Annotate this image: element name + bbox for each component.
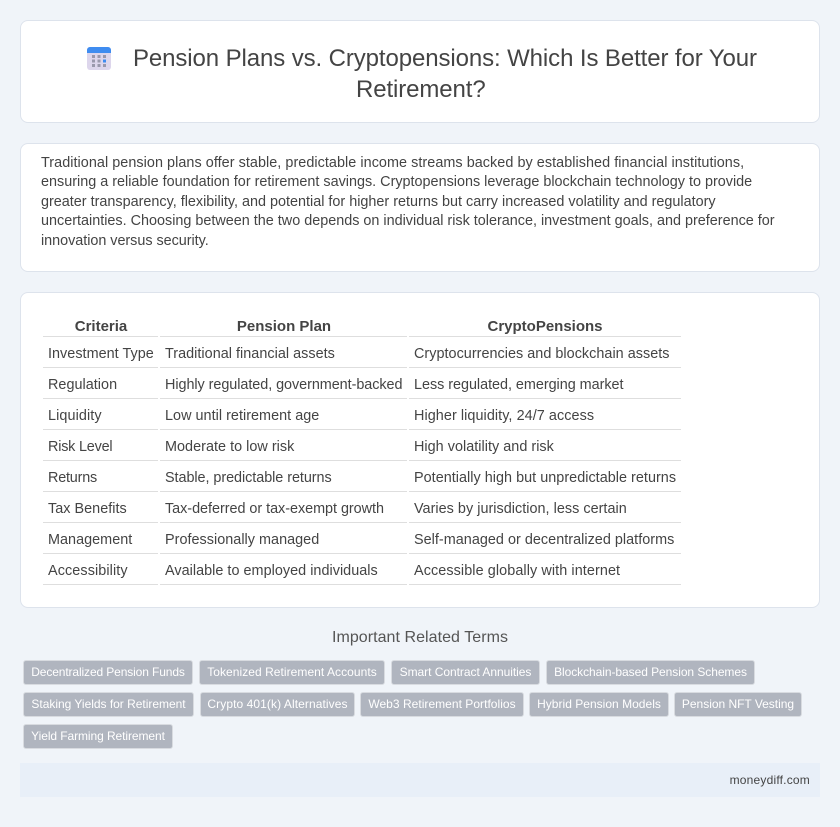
intro text: ensuring a reliable foundation for retirement savings. Cryptopensions leverage blockchain technology to provide (41, 174, 752, 190)
table rows: Available to employed individuals (165, 563, 378, 579)
table rows: Highly regulated, government-backed (165, 377, 402, 393)
header card (20, 20, 820, 123)
related term tags: Tokenized Retirement Accounts (207, 665, 377, 679)
table rows: Cryptocurrencies and blockchain assets (414, 346, 670, 362)
table rows: Accessibility (48, 563, 128, 579)
related term tags: Smart Contract Annuities (400, 665, 531, 679)
related term tags: Blockchain-based Pension Schemes (554, 665, 747, 679)
table rows: Moderate to low risk (165, 439, 294, 455)
table rows: Risk Level (48, 439, 112, 455)
related term tags (23, 660, 802, 749)
table rows: Regulation (48, 377, 117, 393)
table header: CryptoPensions (487, 318, 603, 335)
related term tags: Yield Farming Retirement (31, 729, 165, 743)
comparison table panel (20, 292, 820, 608)
footer bar (20, 763, 820, 797)
related term tags: Crypto 401(k) Alternatives (207, 697, 348, 711)
icon: calendar (87, 47, 111, 70)
title: Pension Plans vs. Cryptopensions: Which Is Better for Your (133, 45, 757, 72)
table rows: Professionally managed (165, 532, 319, 548)
related term tags: Hybrid Pension Models (537, 697, 661, 711)
table rows: Traditional financial assets (165, 346, 335, 362)
related term tags: Web3 Retirement Portfolios (368, 697, 516, 711)
table rows: Tax Benefits (48, 501, 127, 517)
table rows: Tax-deferred or tax-exempt growth (165, 501, 384, 517)
table header (75, 318, 603, 335)
table rows: Higher liquidity, 24/7 access (414, 408, 594, 424)
table rows: Less regulated, emerging market (414, 377, 623, 393)
intro panel (20, 143, 820, 272)
intro text: uncertainties. Choosing between the two depends on individual risk tolerance, investment goals, and preference for (41, 213, 775, 229)
intro text: innovation versus security. (41, 233, 209, 249)
table rows: Potentially high but unpredictable returns (414, 470, 676, 486)
title: Retirement? (356, 76, 486, 103)
intro text: greater transparency, flexibility, and potential for higher returns but carry increased volatility and regulatory (41, 194, 716, 210)
table rows: Self-managed or decentralized platforms (414, 532, 674, 548)
intro text: Traditional pension plans offer stable, predictable income streams backed by established financial institutions, (41, 155, 744, 171)
table rows: Accessible globally with internet (414, 563, 620, 579)
table header: Pension Plan (237, 318, 331, 335)
intro text (41, 155, 775, 249)
title (133, 45, 757, 103)
table rows: High volatility and risk (414, 439, 554, 455)
table rows: Management (48, 532, 132, 548)
table rows: Liquidity (48, 408, 102, 424)
table rows: Stable, predictable returns (165, 470, 332, 486)
table rows: Returns (48, 470, 97, 486)
footer source: moneydiff.com (730, 773, 810, 787)
table rows (43, 336, 681, 585)
table rows: Investment Type (48, 346, 154, 362)
related term tags: Decentralized Pension Funds (31, 665, 185, 679)
related term tags: Staking Yields for Retirement (31, 697, 186, 711)
related terms heading: Important Related Terms (332, 629, 508, 646)
table rows: Varies by jurisdiction, less certain (414, 501, 627, 517)
table header: Criteria (75, 318, 127, 335)
related term tags: Pension NFT Vesting (682, 697, 794, 711)
table rows: Low until retirement age (165, 408, 319, 424)
